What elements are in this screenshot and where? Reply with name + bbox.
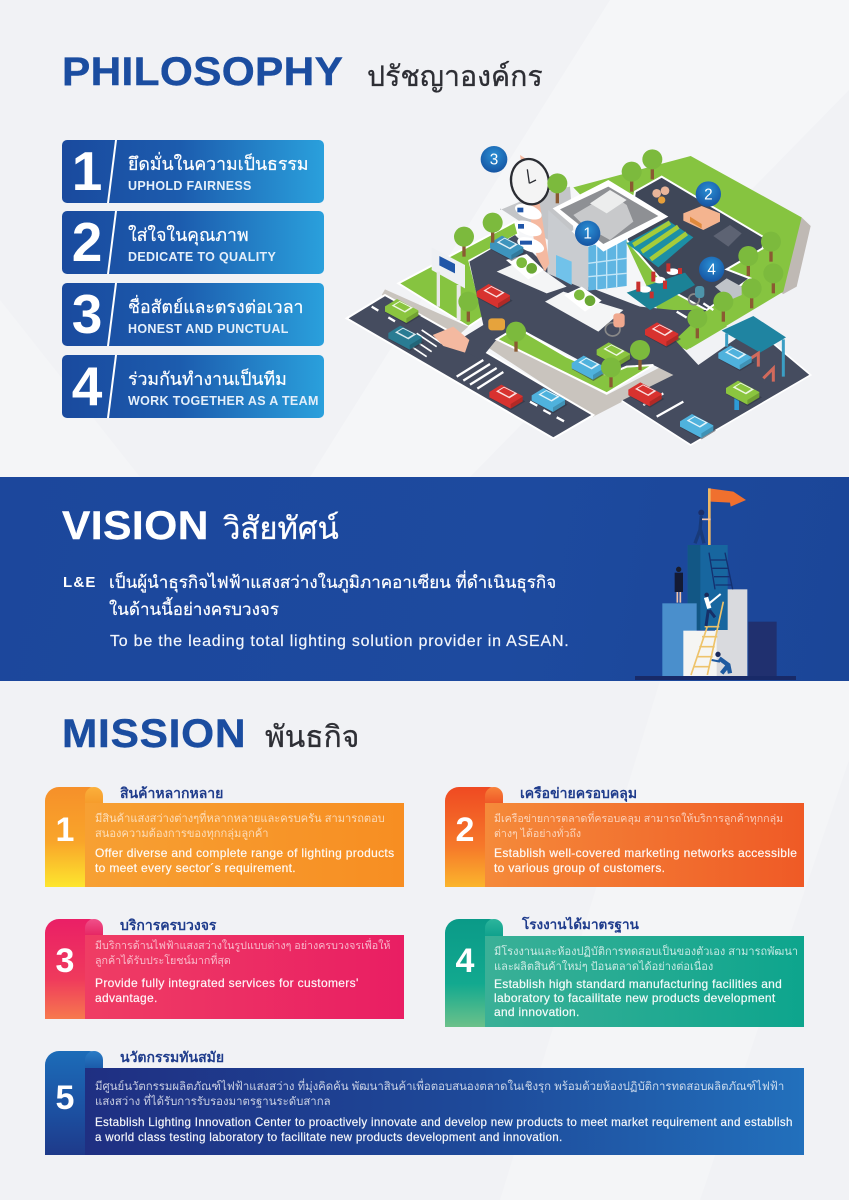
card 1: diverse products: to meet every sector´s requirement. [95, 861, 296, 875]
number markers [481, 146, 724, 282]
ground [347, 156, 811, 445]
item 1 uphold fairness: 1 [72, 140, 102, 202]
item 1 uphold fairness: ยึดมั่นในความเป็นธรรม [128, 154, 309, 174]
title: mission: พันธกิจ [265, 721, 359, 754]
card 1: diverse products [45, 785, 404, 887]
vision thai statement: เป็นผู้นำธุรกิจไฟฟ้าแสงสว่างในภูมิภาคอาเซียน ที่ดำเนินธุรกิจ [109, 573, 556, 592]
building [432, 154, 786, 410]
illustration: climbing blocks with flag [635, 488, 796, 680]
card 4: manufacturing standard: laboratory to facailitate new products development [494, 991, 776, 1005]
card 3: integrated services: advantage. [95, 991, 158, 1005]
card 2: marketing networks: 2 [456, 811, 474, 849]
cars [385, 236, 762, 439]
item 1 uphold fairness [62, 140, 324, 203]
card 4: manufacturing standard: มีโรงงานและห้องปฏิบัติการทดสอบเป็นของตัวเอง สามารถพัฒนา [494, 946, 798, 958]
item 3 honest and punctual [62, 283, 324, 346]
card 1: diverse products: มีสินค้าแสงสว่างต่างๆที่หลากหลายและครบครัน สามารถตอบ [95, 813, 385, 825]
card 3: integrated services: ลูกค้าได้รับประโยชน์มากที่สุด [95, 955, 231, 967]
card 5: innovation: แสงสว่าง ที่ได้รับการรับรองมาตรฐานระดับสากล [95, 1096, 331, 1108]
brand label: L&E [63, 574, 97, 591]
card 2: marketing networks [445, 785, 804, 887]
title: mission: MISSION [62, 712, 246, 756]
card 1: diverse products: Offer diverse and complete range of lighting products [95, 846, 394, 860]
card 5: innovation: นวัตกรรมทันสมัย [120, 1049, 224, 1065]
item 4 work together as a team [62, 355, 324, 418]
card 3: integrated services [45, 917, 404, 1019]
card 5: innovation: a world class testing laboratory to facilitate new products development and innovation. [95, 1131, 563, 1144]
card 2: marketing networks: to various group of customers. [494, 861, 665, 875]
card 5: innovation: Establish Lighting Innovation Center to proactively innovate and develop new products to meet market requirement and establish [95, 1116, 793, 1129]
card 1: diverse products: 1 [56, 811, 74, 849]
card 4: manufacturing standard: และผลิตสินค้าใหม่ๆ ป้อนตลาดได้อย่างต่อเนื่อง [494, 961, 713, 973]
item 2 dedicate to quality: DEDICATE TO QUALITY [128, 250, 276, 264]
number markers: 1 [583, 226, 592, 243]
card 4: manufacturing standard: โรงงานได้มาตรฐาน [522, 917, 639, 932]
card 5: innovation [45, 1049, 804, 1155]
item 4 work together as a team: ร่วมกันทำงานเป็นทีม [128, 369, 287, 389]
item 2 dedicate to quality: ใส่ใจในคุณภาพ [128, 225, 249, 245]
card 1: diverse products: สินค้าหลากหลาย [120, 785, 223, 801]
card 2: marketing networks: ต่างๆ ได้อย่างทั่วถึง [494, 828, 581, 840]
vision heading: VISION [62, 504, 209, 548]
card 3: integrated services: มีบริการด้านไฟฟ้าแสงสว่างในรูปแบบต่างๆ อย่างครบวงจรเพื่อให้ [95, 940, 390, 952]
card 5: innovation: 5 [56, 1079, 74, 1117]
panel: philosophy list [62, 140, 324, 418]
item 2 dedicate to quality [62, 211, 324, 274]
title: philosophy [62, 50, 543, 94]
item 3 honest and punctual: HONEST AND PUNCTUAL [128, 322, 289, 336]
item 3 honest and punctual: ชื่อสัตย์และตรงต่อเวลา [128, 297, 304, 317]
vision thai statement: ในด้านนี้อย่างครบวงจร [109, 600, 279, 619]
card 4: manufacturing standard: 4 [456, 942, 474, 980]
title: philosophy: PHILOSOPHY [62, 50, 343, 94]
number markers: 4 [707, 262, 716, 279]
card 2: marketing networks: Establish well-covered marketing networks accessible [494, 846, 797, 860]
vision thai heading: วิสัยทัศน์ [223, 511, 339, 546]
item 2 dedicate to quality: 2 [72, 211, 102, 273]
card 2: marketing networks: เครือข่ายครอบคลุม [520, 785, 637, 801]
illustration: isometric building site [345, 146, 812, 446]
vision english statement: To be the leading total lighting solution provider in ASEAN. [110, 633, 570, 650]
item 4 work together as a team: 4 [72, 355, 102, 417]
card 2: marketing networks: มีเครือข่ายการตลาดที่ครอบคลุม สามารถให้บริการลูกค้าทุกกลุ่ม [494, 813, 783, 825]
trees [454, 149, 783, 387]
card 3: integrated services: Provide fully integrated services for customers' [95, 976, 359, 990]
card 4: manufacturing standard: Establish high standard manufacturing facilities and [494, 977, 782, 991]
panel: vision band [0, 477, 849, 681]
number markers: 3 [490, 152, 498, 169]
card 4: manufacturing standard [445, 916, 804, 1027]
item 3 honest and punctual: 3 [72, 283, 102, 345]
card 5: innovation: มีศูนย์นวัตกรรมผลิตภัณฑ์ไฟฟ้าแสงสว่าง ที่มุ่งคิดค้น พัฒนาสินค้าเพื่อตอบสนองตลาดในเชิงรุก พร้อมด้วยห้องปฏิบัติการทดสอบผลิตภัณฑ์ไฟฟ้า [95, 1081, 784, 1093]
item 4 work together as a team: WORK TOGETHER AS A TEAM [128, 394, 319, 408]
title: philosophy: ปรัชญาองค์กร [367, 61, 543, 93]
card 1: diverse products: สนองความต้องการของทุกกลุ่มลูกค้า [95, 828, 269, 840]
vision thai statement [109, 570, 556, 619]
card 4: manufacturing standard: and innovation. [494, 1005, 580, 1019]
card 3: integrated services: 3 [56, 942, 74, 980]
title: mission [62, 712, 359, 756]
item 1 uphold fairness: UPHOLD FAIRNESS [128, 179, 252, 193]
number markers: 2 [704, 186, 713, 203]
card 3: integrated services: บริการครบวงจร [120, 917, 216, 933]
